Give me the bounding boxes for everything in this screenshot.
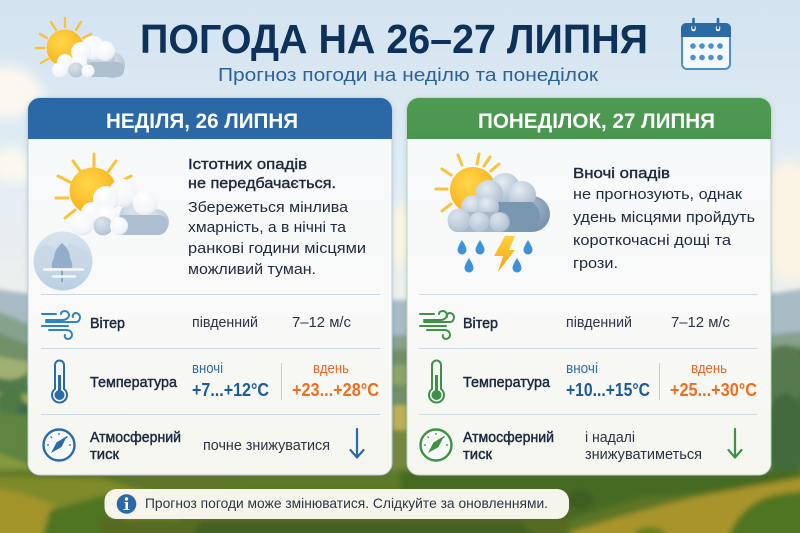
panel header: Sunday <box>28 98 392 139</box>
footer note <box>104 489 569 519</box>
text block: Sunday summary: хмарність, а в нічні та <box>188 219 347 236</box>
text block: Monday summary <box>573 165 755 272</box>
row: temperature: вночі <box>566 360 598 377</box>
icon: sun behind cloud (header) <box>36 18 125 78</box>
footer note: Прогноз погоди може змінюватися. Слідкуйте за оновленнями. <box>145 495 548 511</box>
icon: calendar <box>681 19 731 69</box>
row: atmospheric pressure: і надалі <box>585 429 635 446</box>
row: temperature: вночі <box>192 360 223 377</box>
icon: thermometer <box>429 360 444 403</box>
icon: sun behind clouds <box>56 154 169 236</box>
row: temperature: Температура <box>463 375 551 391</box>
icon: compass gauge <box>44 430 74 460</box>
text block: Sunday summary: не передбачається. <box>188 175 336 192</box>
row: temperature: +23...+28°C <box>292 380 379 400</box>
panel header: Monday <box>407 98 771 139</box>
row: wind: 7–12 м/с <box>671 314 730 331</box>
row: temperature <box>52 360 379 403</box>
row: temperature: +25...+30°C <box>670 380 757 400</box>
row: wind: 7–12 м/с <box>292 314 351 331</box>
icon: sun, storm cloud, rain and lightning <box>436 154 550 272</box>
text block: Monday summary: удень місцями пройдуть <box>573 209 755 226</box>
panel: Sunday 26 July <box>28 98 392 475</box>
row: temperature: +10...+15°C <box>566 380 650 400</box>
row: wind: південний <box>192 314 258 331</box>
row: atmospheric pressure: почне знижуватися <box>203 437 330 454</box>
panel: Monday 27 July <box>407 98 771 475</box>
text block: Monday summary: не прогнозують, однак <box>573 186 742 203</box>
row: atmospheric pressure: Атмосферний <box>90 430 181 446</box>
text block: Sunday summary: Збережеться мінлива <box>188 199 349 216</box>
row: atmospheric pressure <box>420 429 742 463</box>
row: temperature: вдень <box>313 360 349 377</box>
panel header: Sunday: НЕДІЛЯ, 26 ЛИПНЯ <box>106 110 298 133</box>
text block: Monday summary: грози. <box>573 255 618 272</box>
text block: Monday summary: Вночі опадів <box>573 165 670 182</box>
icon: wind <box>420 311 454 339</box>
row: atmospheric pressure: знижуватиметься <box>585 446 702 463</box>
icon: fog over tree <box>34 232 92 290</box>
arrow: down <box>350 429 364 458</box>
icon: wind <box>42 311 80 339</box>
row: wind: південний <box>566 314 632 331</box>
subtitle: Прогноз погоди на неділю та понеділок <box>218 64 599 85</box>
icon: thermometer <box>52 360 67 403</box>
row: wind <box>42 311 351 339</box>
row: wind <box>420 311 730 339</box>
text block: Sunday summary: ранкові години місцями <box>188 240 366 257</box>
title: ПОГОДА НА 26–27 ЛИПНЯ <box>140 16 648 62</box>
panel header: Monday: ПОНЕДІЛОК, 27 ЛИПНЯ <box>478 110 715 133</box>
row: wind: Вітер <box>90 316 125 332</box>
row: temperature: Температура <box>90 375 178 391</box>
row: temperature <box>429 360 757 403</box>
icon: compass gauge <box>420 430 452 460</box>
text block: Sunday summary <box>188 156 366 278</box>
row: temperature: вдень <box>691 360 727 377</box>
text block: Sunday summary: Істотних опадів <box>188 156 307 173</box>
text block: Sunday summary: можливий туман. <box>188 261 316 278</box>
arrow: down <box>728 429 742 458</box>
icon: info <box>117 494 136 514</box>
row: atmospheric pressure <box>44 429 364 463</box>
row: atmospheric pressure: тиск <box>90 447 120 463</box>
row: temperature: +7...+12°C <box>192 380 269 400</box>
row: atmospheric pressure: Атмосферний <box>463 430 554 446</box>
row: wind: Вітер <box>463 316 498 332</box>
row: atmospheric pressure: тиск <box>463 447 493 463</box>
text block: Monday summary: короткочасні дощі та <box>573 232 732 249</box>
